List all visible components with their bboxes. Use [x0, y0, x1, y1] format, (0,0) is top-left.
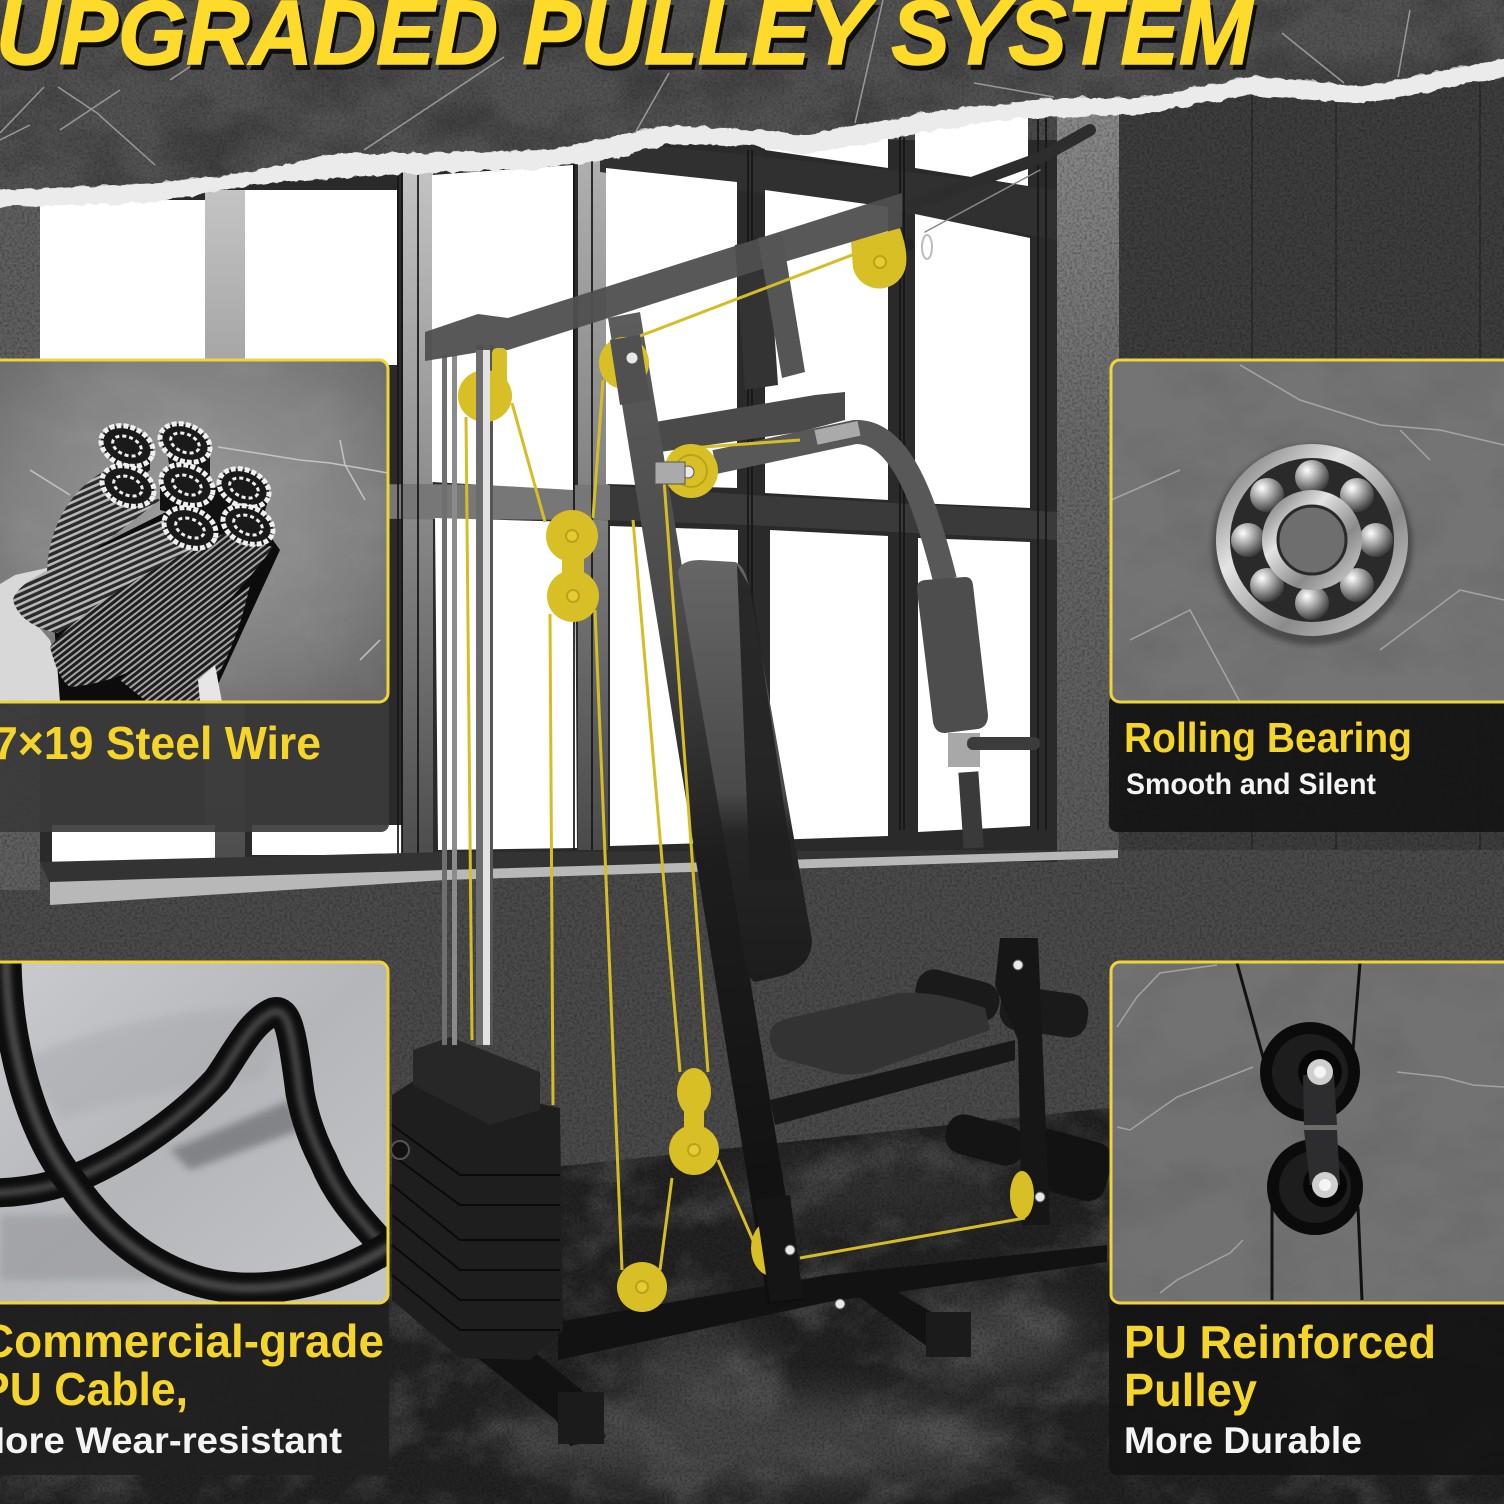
image: PU cable: [0, 955, 395, 1303]
stone header band: [0, 0, 1504, 190]
top beam: [425, 193, 902, 361]
image: PU pulley: [1111, 962, 1504, 1303]
panel: steel wire: [0, 360, 389, 832]
pulley bolts: [626, 352, 1045, 1309]
window frame and panes: [40, 100, 1057, 884]
panel: PU pulley: [1109, 962, 1504, 1475]
yellow pulleys: [458, 228, 1034, 1312]
frame: PU pulley: [1111, 962, 1504, 1303]
image: rolling bearing: [1111, 360, 1504, 702]
label: 7×19 Steel Wire: 7×19 Steel Wire: [0, 717, 321, 769]
back pad: [678, 560, 812, 982]
label box: PU pulley: [1109, 1296, 1504, 1475]
label box: steel wire: [0, 695, 389, 832]
front strut: [758, 233, 805, 378]
base frame: [470, 1245, 1107, 1446]
main column: [608, 312, 803, 1305]
leg post: [995, 938, 1050, 1225]
panel: rolling bearing: [1109, 360, 1504, 832]
label: Rolling Bearing, Smooth and Silent: Smooth and Silent: [1126, 768, 1376, 801]
leg rollers: [911, 965, 1116, 1205]
frame: rolling bearing: [1111, 360, 1504, 702]
label: PU Reinforced Pulley, More Durable: [1124, 1316, 1436, 1461]
torn paper edge: [0, 0, 1504, 208]
column over pulleys: [610, 335, 650, 405]
arm pad: [917, 577, 988, 733]
frame: steel wire: [0, 360, 388, 702]
carabiner: [902, 235, 932, 259]
frame: PU cable: [0, 962, 388, 1303]
label: PU Reinforced Pulley, More Durable: Pulley: [1124, 1364, 1257, 1416]
rear vertical strut: [735, 238, 778, 390]
top handle: [912, 130, 1090, 232]
label: Commercial-grade PU Cable, More Wear-resistant: [0, 1315, 384, 1461]
label: PU Reinforced Pulley, More Durable: More Durable: [1124, 1420, 1362, 1461]
arm stem and handle: [948, 733, 1040, 849]
yellow cables: [466, 252, 1025, 1270]
rods over pulley: [476, 350, 490, 430]
floor: [0, 1090, 1504, 1504]
weight stack: [391, 1037, 563, 1360]
label box: PU cable: [0, 1296, 389, 1475]
guide rods: [442, 345, 493, 1045]
label: Rolling Bearing, Smooth and Silent: Rolling Bearing: [1124, 714, 1412, 761]
image: steel wire rope: [0, 360, 388, 702]
seat: [770, 993, 1015, 1125]
label box: rolling bearing: [1109, 695, 1504, 832]
back pad shadow side: [737, 565, 795, 880]
pad arm tube: [715, 432, 945, 580]
label: Rolling Bearing, Smooth and Silent: [1124, 714, 1412, 801]
panel: PU cable: [0, 955, 395, 1475]
window sill: [50, 850, 1118, 905]
label: PU Reinforced Pulley, More Durable: PU Reinforced: [1124, 1316, 1436, 1368]
pulley hubs: [566, 256, 886, 1293]
gym machine: [391, 130, 1116, 1446]
arm bracket: [655, 392, 845, 452]
